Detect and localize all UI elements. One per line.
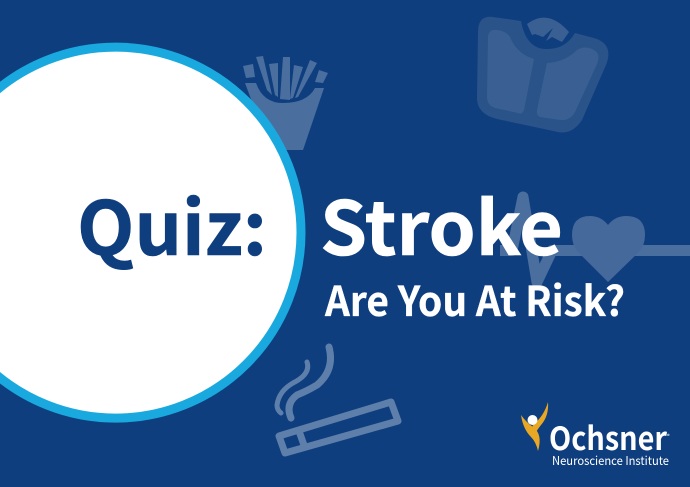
registered mark: ® [667, 433, 670, 440]
icon: weighing scale [477, 17, 608, 132]
icon: heart [572, 216, 645, 282]
heading: Stroke: Stroke [320, 170, 563, 277]
heading: Quiz: Quiz: [77, 170, 267, 277]
white circle with blue ring [0, 47, 301, 418]
icon: heartbeat line [500, 197, 690, 282]
logo subtitle: Neuroscience Institute [552, 452, 669, 469]
icon: french fries [243, 56, 328, 150]
logo wordmark: Ochsner [549, 414, 667, 460]
subheading: Are You At Risk: Are You At Risk? [324, 268, 625, 328]
logo: Ochsner Neuroscience Institute [521, 402, 670, 469]
logo icon: gold figure [521, 402, 548, 451]
icon: cigarette with smoke [277, 347, 398, 453]
